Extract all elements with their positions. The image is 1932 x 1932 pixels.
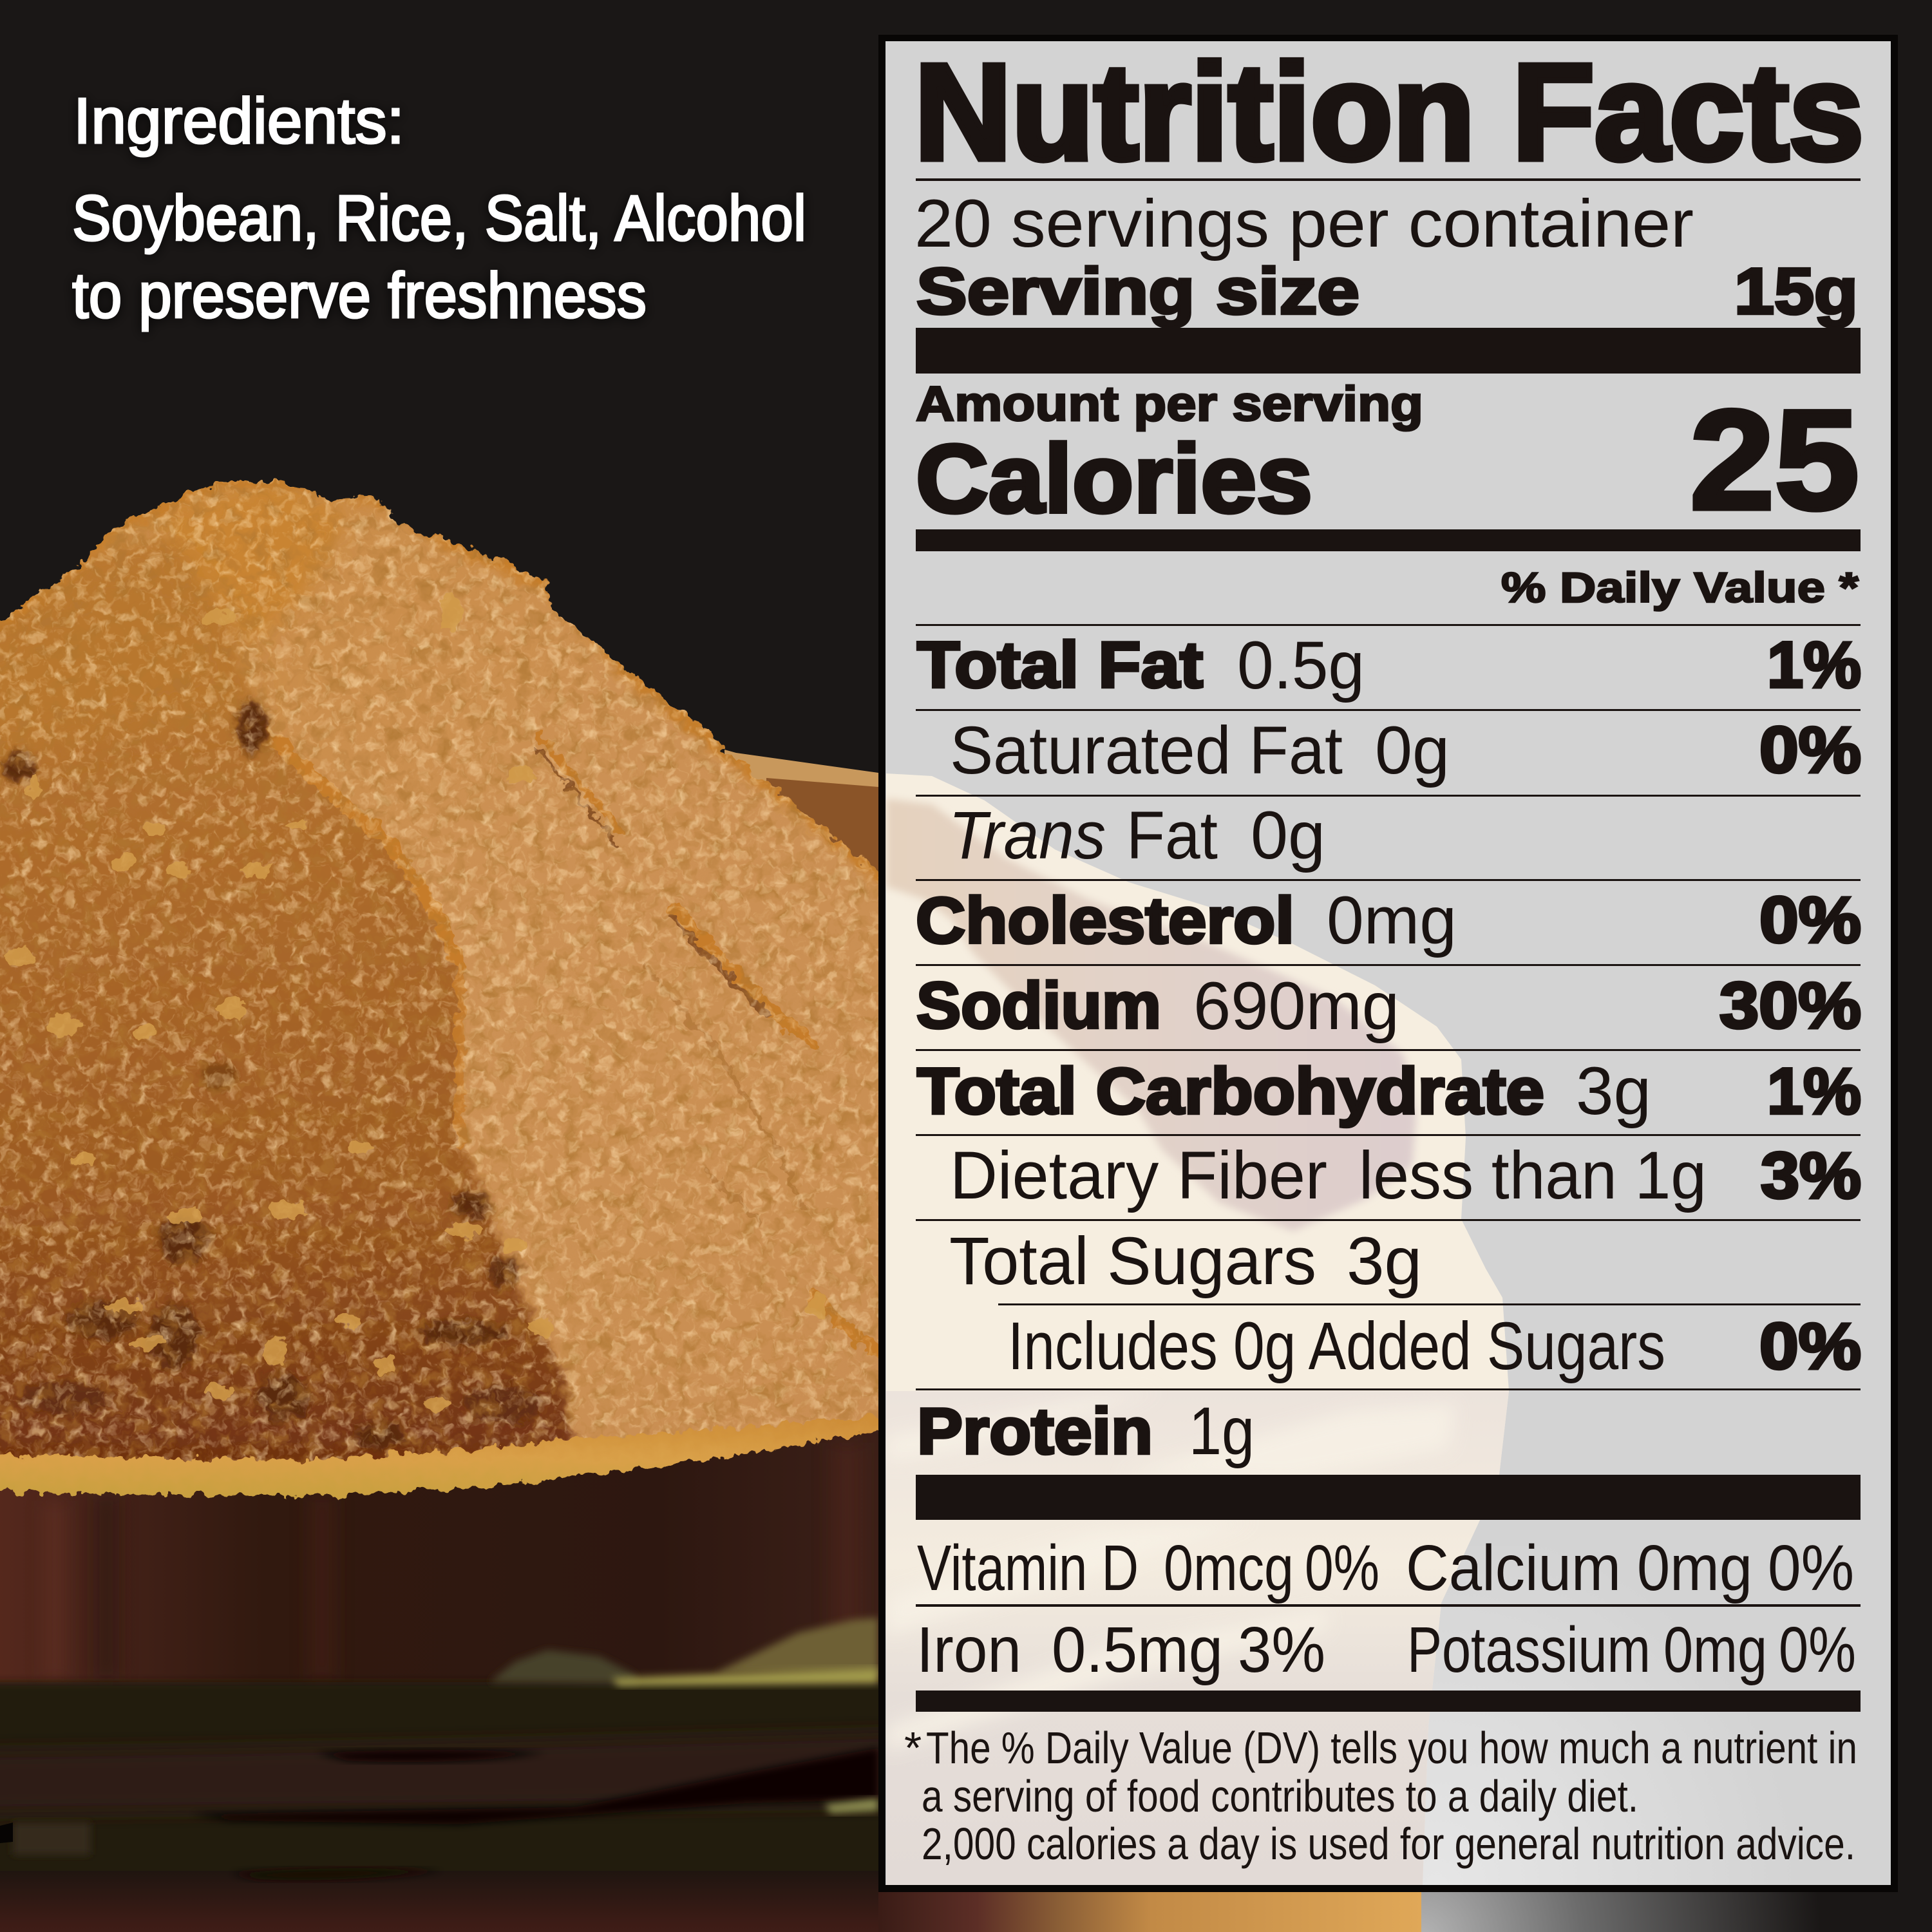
row: protein [917,1394,1255,1469]
row: dietary fiber: Dietary Fiber [950,1138,1327,1213]
row: saturated fat: 0g [1375,713,1450,788]
amount per serving: Amount per serving [916,377,1423,431]
footnote: a serving of food contributes to a daily diet. [922,1771,1638,1821]
row: total carbohydrate: 1% [1767,1056,1861,1128]
row: sodium: Sodium [916,970,1161,1042]
title: Nutrition Facts [914,35,1864,188]
servings per container: 20 servings per container [914,186,1694,261]
row: cholesterol: 0mg [1327,883,1457,958]
row: saturated fat: Saturated Fat [950,713,1343,788]
row: saturated fat: 0% [1759,714,1861,786]
row: trans fat: 0g [1251,798,1325,873]
calories label: Calories [916,424,1312,533]
footnote: * [904,1723,922,1773]
row: dietary fiber: 3% [1761,1140,1861,1212]
row: iron and potassium: Potassium [1407,1614,1651,1686]
row: total fat: Total Fat [917,629,1203,701]
bowl far rim [724,750,878,914]
row: total fat: 0.5g [1237,628,1365,703]
row: total fat: 1% [1767,629,1861,701]
orange outline of crest [0,480,914,902]
row: cholesterol [916,883,1861,958]
row: dietary fiber: less than 1g [1359,1138,1707,1213]
bowl body [0,1417,878,1700]
row: vitamin d and calcium: Calcium [1406,1532,1621,1604]
miso mound [0,477,914,1468]
ridges [259,727,878,1352]
row: total carbohydrate: Total Carbohydrate [917,1056,1544,1128]
row: iron and potassium: 3% [1238,1614,1325,1686]
panel background showing bowl through [886,41,1891,1885]
row: trans fat [949,798,1325,873]
row: total sugars: 3g [1347,1224,1422,1299]
photo: miso in wooden bowl [0,477,1932,1932]
row: dietary fiber [950,1138,1861,1213]
medium bar [916,529,1861,551]
row: vitamin d and calcium: 0mcg [1164,1532,1294,1604]
row: added sugars: 0% [1759,1311,1861,1383]
row: iron and potassium: Iron [916,1614,1021,1686]
title rule [916,178,1861,181]
calories value: 25 [1690,381,1859,539]
nutrition facts panel [886,35,1891,1885]
row: vitamin d and calcium [917,1532,1854,1604]
bowl lower base and shadows [0,1618,902,1932]
daily value header: % Daily Value * [1501,564,1859,611]
dark clumps [3,702,541,1449]
row: vitamin d and calcium: Vitamin D [917,1532,1139,1604]
grain texture [0,477,914,1468]
row: trans fat: Trans [949,798,1106,873]
row: iron and potassium: 0% [1779,1614,1856,1686]
footnote [904,1723,1857,1869]
row: vitamin d and calcium: 0% [1305,1532,1379,1604]
medium bar [916,1690,1861,1712]
ingredients text: to preserve freshness [72,260,647,332]
ingredients text: Soybean, Rice, Salt, Alcohol [72,182,806,254]
row: iron and potassium: 0mg [1663,1614,1767,1686]
row: sodium: 30% [1719,970,1861,1042]
row: total fat [917,628,1861,703]
row: total carbohydrate [917,1054,1861,1129]
serving size row: Serving size [916,256,1359,328]
bright clumps [6,592,827,1410]
ingredients text: Ingredients: [73,85,404,157]
row: total sugars: Total Sugars [949,1224,1316,1299]
row: protein: 1g [1189,1394,1255,1469]
row rules [916,624,1861,1390]
row: saturated fat [950,713,1861,788]
bowl wood stripes [45,1443,863,1681]
row: cholesterol: Cholesterol [916,885,1294,957]
row: sodium: 690mg [1193,969,1399,1044]
ingredients text [72,85,806,332]
bottom table strip [878,1892,1932,1932]
bowl front rim [0,1404,914,1495]
thick bar [916,328,1861,374]
shadowed left face [0,535,575,1468]
row: iron and potassium [916,1614,1856,1686]
row: trans fat: Fat [1126,798,1218,873]
serving size row: 15g [1734,256,1858,328]
thick bar [916,1475,1861,1520]
row: vitamin d and calcium: 0mg [1637,1532,1752,1604]
vitamin rule [916,1604,1861,1607]
row: total carbohydrate: 3g [1576,1054,1651,1129]
row: cholesterol: 0% [1759,884,1861,956]
row: sodium [916,969,1861,1044]
row: protein: Protein [917,1396,1153,1468]
ridge shadows [535,747,766,1014]
serving size row [916,256,1858,328]
row: vitamin d and calcium: 0% [1768,1532,1854,1604]
row: iron and potassium: 0.5mg [1052,1614,1223,1686]
row: added sugars: Includes 0g Added Sugars [1008,1309,1665,1384]
crown highlight [161,483,348,644]
panel border [878,35,1898,1892]
